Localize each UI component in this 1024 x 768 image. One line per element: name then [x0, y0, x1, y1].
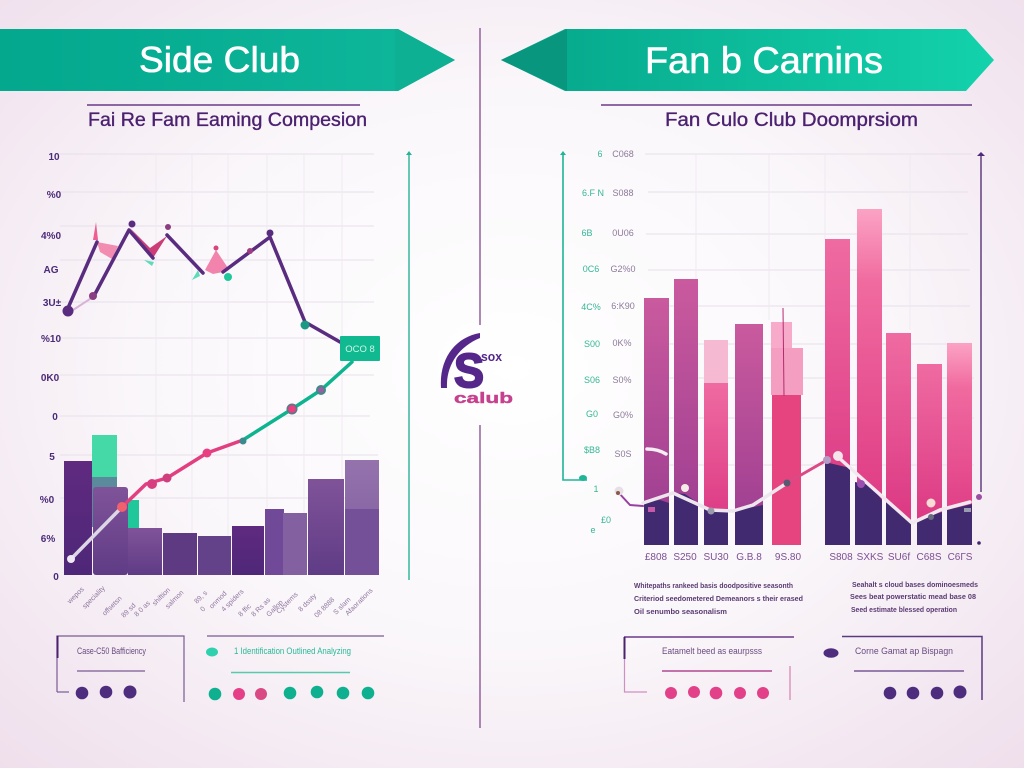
right chart x labels [645, 552, 973, 563]
right chart grey y labels: 0K% [612, 338, 632, 348]
left chart rotated x labels: Cystems [275, 591, 300, 615]
left chart rotated x labels: 8 ffic [237, 603, 253, 618]
left chart rotated x labels: 8 Rs as [250, 596, 273, 618]
right chart green y labels [581, 149, 611, 535]
right chart green y labels: e [590, 525, 596, 535]
left chart y-axis labels: %0 [40, 495, 55, 506]
right chart x labels: £808 [645, 552, 668, 563]
teal legend label: 1 Identification Outlined Analyzing [234, 646, 351, 656]
right chart green y labels: S00 [584, 339, 600, 349]
left chart rotated x labels: 08 8888 [313, 596, 336, 619]
right subtitle: Fan Culo Club Doomprsiom [665, 110, 918, 131]
left chart rotated x labels: shiftion [151, 587, 172, 607]
legend box: left panel purple [57, 636, 184, 702]
right chart x labels: S808 [829, 552, 853, 563]
right chart grey y labels: S0S [614, 449, 632, 459]
left subtitle: Fai Re Fam Eaming Compesion [88, 109, 367, 131]
logo small text: sox [481, 349, 503, 364]
right explanatory paragraph: Sees beat powerstatic mead base 08 [850, 592, 976, 601]
right chart bars [644, 209, 972, 545]
left chart rotated x labels: speciality [81, 585, 107, 610]
left chart y-axis labels: %0 [47, 190, 62, 201]
green value callout: OCO 8 [345, 344, 375, 355]
right chart grey y labels [610, 149, 636, 459]
teal blob icon [206, 648, 218, 656]
right chart x labels: SU6f [888, 552, 910, 563]
left chart rotated x labels: Afaorations [344, 587, 375, 617]
central divider [479, 28, 481, 728]
left chart y-axis labels: 6% [41, 534, 55, 545]
right chart grey y labels: 6:K90 [611, 301, 635, 311]
left chart [40, 151, 412, 619]
right chart wave line [614, 449, 971, 523]
right chart green y labels: 6.F N [582, 188, 604, 198]
left chart y-axis labels: %10 [41, 334, 61, 345]
logo caption: calub [454, 390, 513, 407]
right chart green y labels: 6B [581, 228, 593, 238]
left chart rotated x labels: onmod [208, 590, 229, 610]
legend dots [76, 686, 136, 699]
right chart grey y labels: S0% [612, 375, 632, 385]
left chart rotated x labels: 89, s [193, 589, 209, 605]
logo [441, 333, 513, 407]
legend label: Case-C50 Bafficiency [77, 646, 146, 656]
right chart gridlines [645, 154, 974, 465]
pink legend label: Eatamelt beed as eaurpsss [662, 646, 762, 656]
left chart y-axis labels: 3U± [43, 298, 62, 309]
left chart y-axis labels: 4%0 [41, 231, 61, 242]
logo arc [441, 333, 480, 388]
right chart green y labels: £0 [601, 515, 611, 525]
right chart x labels: C6ГS [948, 552, 973, 563]
right chart x labels: G.B.8 [736, 552, 762, 563]
left chart rotated x labels: 0 [199, 606, 207, 613]
right banner title: Fan b Carnins [645, 40, 883, 81]
purple line markers [62, 220, 310, 330]
right explanatory paragraph: Seed estimate blessed operation [851, 605, 957, 614]
legend box: right panel purple [824, 636, 982, 700]
left chart bars [64, 435, 379, 575]
purple dots [884, 686, 966, 699]
rising trend line [67, 362, 352, 563]
green value callout [340, 336, 380, 361]
left banner title: Side Club [139, 39, 300, 80]
right chart grey y labels: G2%0 [610, 264, 636, 274]
left chart rotated x labels: wepos [66, 586, 86, 606]
left chart y-axis labels: AG [44, 265, 59, 276]
left chart rotated x labels: 89 sd [120, 602, 138, 619]
right chart x labels: SXKS [857, 552, 884, 563]
left chart gridlines [60, 154, 378, 575]
right chart dark bar bases [644, 462, 972, 545]
left chart y-axis labels: 5 [49, 452, 55, 463]
legend box: right panel pink [624, 637, 794, 700]
left banner [0, 29, 455, 91]
left chart rotated x labels: offsetsn [101, 595, 124, 617]
right chart green y labels: 0C6 [583, 264, 599, 274]
left chart y-axis labels: 0 [52, 412, 58, 423]
left explanatory paragraph: Oil senumbo seasonalism [634, 607, 727, 616]
dark blob icon [824, 648, 838, 658]
right chart x labels: S250 [673, 552, 697, 563]
right chart green y labels: 1 [593, 484, 599, 494]
purple legend label: Corne Gamat ap Bispagn [855, 646, 953, 656]
right chart x labels: 9S.80 [775, 552, 802, 563]
left chart rotated x labels: 8 dssty [297, 592, 318, 613]
right chart grey y labels: S088 [612, 188, 634, 198]
left explanatory paragraph: Criteriod seedometered Demeanors s their erased [634, 594, 803, 603]
left chart rotated x labels: 4 spiders [220, 588, 246, 613]
right chart green y labels: S06 [584, 375, 600, 385]
right chart green y labels: 4C% [581, 302, 601, 312]
teal and pink dots [209, 686, 374, 700]
right chart x labels: C68S [916, 552, 942, 563]
right chart grey y labels: 0U06 [612, 228, 634, 238]
logo mark: S [454, 345, 484, 398]
left chart y-axis labels [40, 152, 62, 583]
right chart green y labels: $B8 [584, 445, 600, 455]
rising line markers [67, 385, 326, 563]
right chart green y labels: G0 [586, 409, 598, 419]
left explanatory paragraph [634, 581, 803, 616]
right chart x labels: SU30 [703, 552, 729, 563]
right banner [501, 29, 994, 91]
pink dots [665, 686, 769, 699]
left chart y-axis labels: 10 [48, 152, 60, 163]
right chart teal axis [560, 151, 587, 481]
left chart y-axis labels: 0K0 [41, 373, 60, 384]
right chart purple axis [976, 152, 985, 545]
pink and teal accents behind purple line [93, 222, 232, 281]
left chart rotated x labels: salmon [164, 589, 185, 610]
right chart green y labels: 6 [597, 149, 603, 159]
left chart y-axis labels: 0 [53, 572, 59, 583]
right explanatory paragraph: Seahalt s cloud bases dominoesmeds [852, 580, 978, 589]
legend box: left panel teal [206, 636, 384, 700]
left chart right axis arrow [406, 151, 412, 580]
left chart rotated x labels: S slam [332, 596, 353, 616]
purple trend line [62, 220, 340, 342]
left chart rotated x labels [66, 585, 375, 619]
right chart grey y labels: C068 [612, 149, 634, 159]
left explanatory paragraph: Whitepaths rankeed basis doodpositive seasonth [634, 581, 793, 590]
right chart [560, 149, 985, 616]
left chart rotated x labels: Gallop [265, 599, 285, 618]
left chart rotated x labels: 8 0 as [133, 600, 152, 618]
wave line markers [614, 451, 971, 520]
right chart grey y labels: G0% [613, 410, 633, 420]
right explanatory paragraph [850, 580, 978, 614]
